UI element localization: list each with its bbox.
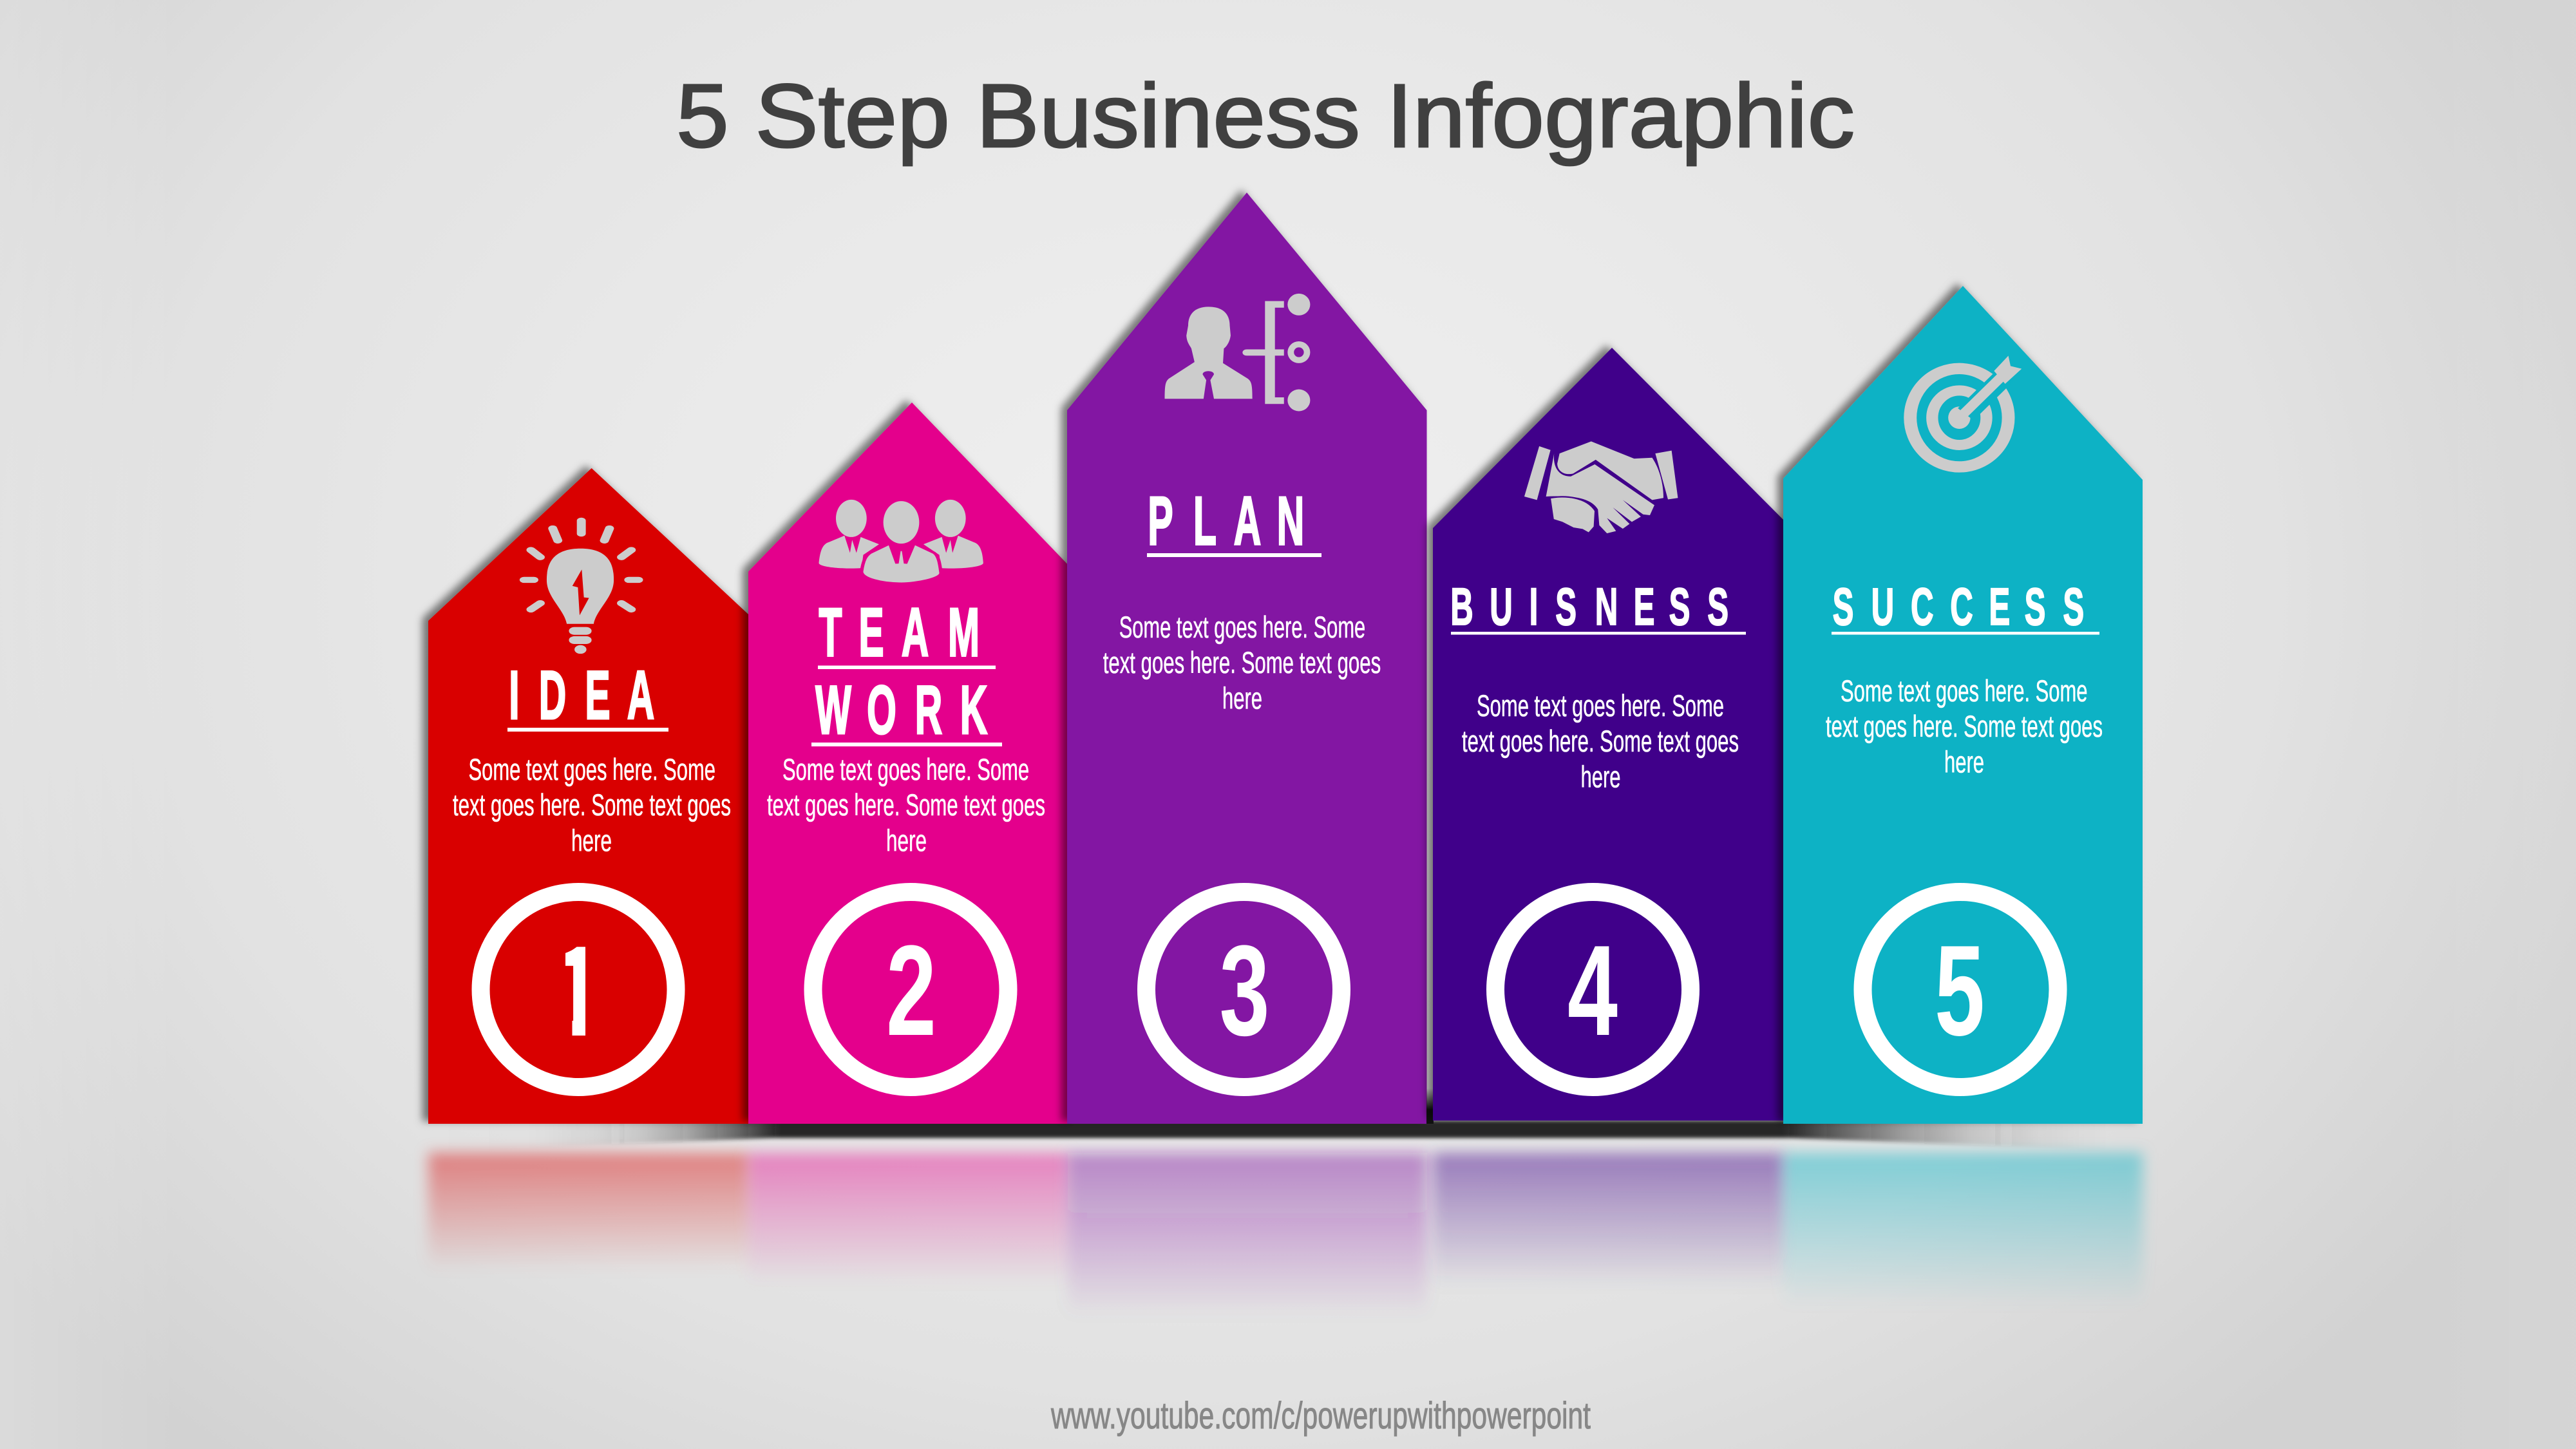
infographic canvas [417,80,2152,1436]
gap shadow between purple panels [1426,1088,1434,1124]
icon: light bulb [524,520,639,654]
shape: indigo arrow [1433,348,1794,1121]
footer url: www.youtube.com/c/powerupwithpowerpoint [1050,1395,1591,1437]
heading: SUCCESS [1833,578,2084,636]
body text: here [1580,760,1620,793]
number badge 1 [480,892,676,1087]
shape: pink arrow [748,402,1075,1124]
number badge 5 [1862,892,2058,1087]
body text: here [1222,681,1262,715]
body text: text goes here. Some text goes [1826,709,2103,743]
heading: IDEA [509,658,654,734]
heading underline 2 [811,743,1002,746]
body text: text goes here. Some text goes [1103,645,1381,679]
body text: Some text goes here. Some [1477,688,1724,723]
icon: handshake [1524,441,1678,533]
number badge 3 [1146,892,1341,1087]
number badge 2: 2 [886,918,936,1063]
number badge 1: 1 [550,893,607,1072]
number badge 4 [1495,892,1690,1087]
panel: step 4 business [1433,348,1794,1121]
panel: step 5 success [1783,286,2143,1124]
shape: purple arrow [1067,193,1427,1124]
shape: teal arrow [1783,286,2143,1124]
heading line 2: WORK [815,672,987,749]
body text: Some text goes here. Some [1119,610,1365,644]
body text: text goes here. Some text goes [1462,724,1739,758]
icon: target with arrow [1910,355,2022,467]
title: 5 Step Business Infographic [676,65,1855,166]
body text [453,752,731,858]
body text: here [886,823,927,858]
body text: here [1944,744,1984,779]
panel: step 1 idea [428,468,757,1124]
heading underline [1147,553,1321,557]
number badge 2 [813,892,1009,1087]
heading underline 1 [818,666,996,669]
body text: here [571,823,612,858]
body text [1826,674,2103,779]
floor reflections [428,1153,2143,1317]
heading underline [1451,632,1746,635]
shape: red arrow [428,468,757,1124]
heading underline [1832,632,2099,635]
panel: step 2 team work [748,402,1075,1124]
body text [1462,688,1739,793]
number badge 4: 4 [1567,918,1618,1063]
body text: text goes here. Some text goes [453,788,731,822]
heading underline [507,728,668,732]
body text: text goes here. Some text goes [767,788,1045,822]
ground shadow band [428,1121,2143,1151]
icon: person with org tree [1165,294,1310,411]
icon: team [819,500,983,583]
panel: step 3 plan [1067,193,1427,1124]
body text: Some text goes here. Some [1841,674,2088,708]
body text [1103,610,1381,715]
body text [767,752,1045,858]
number badge 5: 5 [1935,918,1985,1063]
heading: PLAN [1148,483,1304,560]
body text: Some text goes here. Some [782,752,1029,786]
heading: BUISNESS [1450,578,1728,636]
body text: Some text goes here. Some [469,752,715,786]
heading line 1: TEAM [819,594,980,671]
number badge 3: 3 [1220,918,1269,1063]
